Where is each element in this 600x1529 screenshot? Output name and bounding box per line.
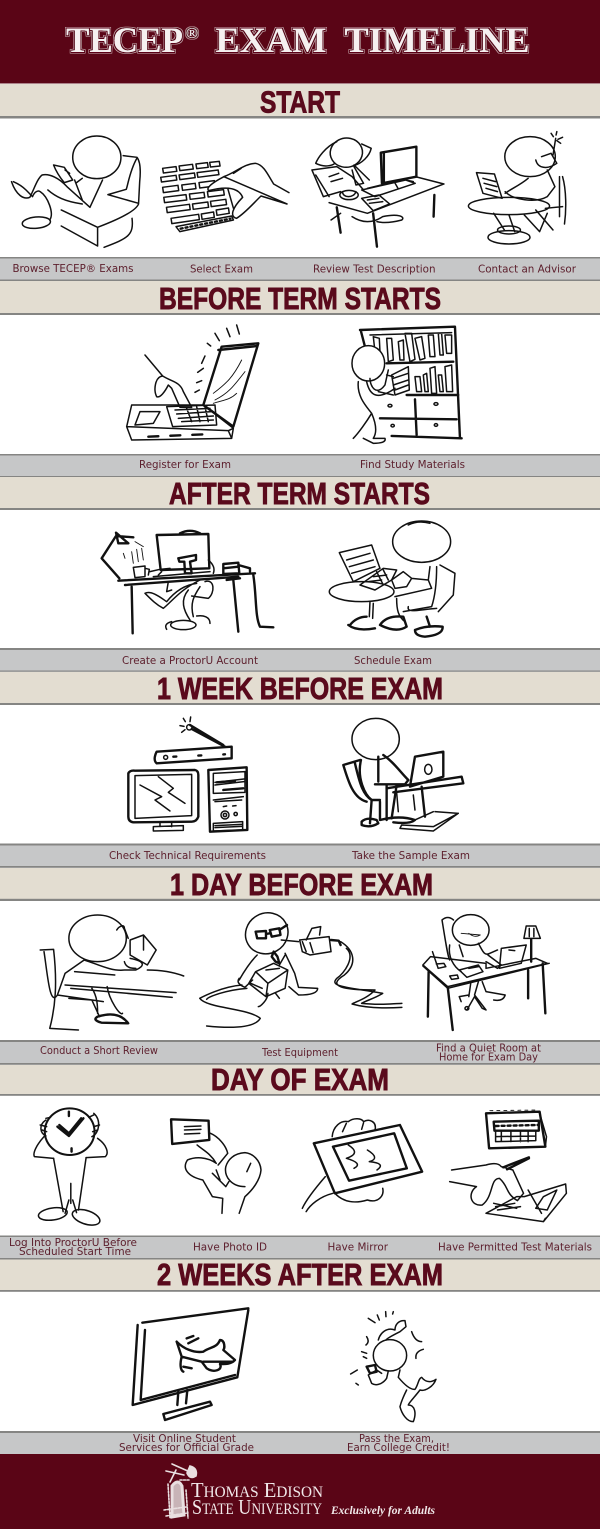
caption: contact: Contact an Advisor bbox=[478, 264, 577, 276]
title: TIMELINE bbox=[344, 20, 530, 60]
caption: online student services bbox=[119, 1433, 254, 1454]
caption: log into proctoru: Scheduled Start Time bbox=[19, 1246, 131, 1258]
heading: two weeks after exam: 2 WEEKS AFTER EXAM bbox=[157, 1257, 443, 1292]
icon: person taking sample exam on laptop bbox=[343, 718, 463, 831]
caption: proctoru account: Create a ProctorU Account bbox=[122, 655, 258, 667]
caption: short review: Conduct a Short Review bbox=[40, 1045, 158, 1057]
caption: schedule: Schedule Exam bbox=[354, 655, 432, 667]
heading: one week before exam: 1 WEEK BEFORE EXAM bbox=[157, 671, 443, 706]
caption: browse: Browse TECEP® Exams bbox=[12, 263, 134, 275]
icon: celebrating person bbox=[351, 1312, 436, 1422]
icon: monitor with thumbs up bbox=[133, 1308, 248, 1420]
caption: quiet room bbox=[436, 1042, 541, 1064]
caption: log into proctoru: Log Into ProctorU Before bbox=[9, 1237, 137, 1249]
caption: quiet room: Find a Quiet Room at bbox=[436, 1042, 541, 1054]
heading: after term starts: AFTER TERM STARTS bbox=[169, 476, 430, 511]
caption: select: Select Exam bbox=[190, 264, 253, 276]
university name: THOMAS EDISON bbox=[191, 1478, 323, 1502]
icon: calendar pencil and notebook bbox=[450, 1110, 566, 1222]
caption: test materials: Have Permitted Test Materials bbox=[438, 1242, 592, 1254]
caption: pass the exam: Pass the Exam, bbox=[359, 1433, 434, 1445]
icon: person with glasses testing equipment bbox=[200, 909, 402, 1027]
caption: online student services: Services for Official Grade bbox=[119, 1442, 254, 1454]
caption: pass the exam bbox=[347, 1433, 450, 1454]
title: TECEP bbox=[66, 20, 183, 60]
icon: person working at home desk bbox=[423, 915, 549, 1030]
icon: person at bookshelf bbox=[352, 327, 462, 443]
caption: online student services: Visit Online Student bbox=[133, 1433, 236, 1445]
panel: start bbox=[0, 84, 600, 281]
caption: log into proctoru bbox=[9, 1237, 137, 1258]
caption: study materials: Find Study Materials bbox=[360, 459, 465, 471]
caption: review: Review Test Description bbox=[313, 264, 436, 276]
icon: person reading in chair bbox=[40, 915, 184, 1030]
panel: one day before exam bbox=[0, 867, 600, 1065]
heading: day of exam: DAY OF EXAM bbox=[211, 1062, 389, 1097]
caption: pass the exam: Earn College Credit! bbox=[347, 1442, 450, 1454]
icon: person behind desk and monitor bbox=[102, 531, 273, 633]
panel: two weeks after exam bbox=[0, 1257, 600, 1454]
panel: after term starts bbox=[0, 476, 600, 672]
caption: quiet room: Home for Exam Day bbox=[439, 1052, 538, 1064]
icon: hand holding photo ID bbox=[171, 1119, 261, 1213]
icon: person phoning advisor at round table bbox=[468, 132, 566, 244]
footer banner bbox=[0, 1454, 600, 1529]
icon: person on sofa with phone bbox=[11, 136, 140, 247]
caption: test equipment: Test Equipment bbox=[261, 1047, 338, 1059]
panel: one week before exam bbox=[0, 671, 600, 868]
caption: register: Register for Exam bbox=[139, 459, 231, 471]
caption: mirror: Have Mirror bbox=[328, 1242, 389, 1254]
icon: router monitor and computer bbox=[128, 717, 247, 832]
heading: start: START bbox=[260, 84, 340, 120]
title: EXAM bbox=[216, 20, 326, 60]
university name bbox=[191, 1478, 323, 1519]
icon: hands holding mirror bbox=[302, 1119, 422, 1212]
icon: university lamp logo bbox=[164, 1464, 196, 1518]
icon: person typing at round table bbox=[329, 521, 455, 637]
heading: one day before exam: 1 DAY BEFORE EXAM bbox=[170, 867, 433, 902]
icon: finger on laptop bbox=[127, 325, 258, 440]
header banner bbox=[0, 0, 600, 84]
panel: before term starts bbox=[0, 281, 600, 477]
caption: photo id: Have Photo ID bbox=[193, 1242, 267, 1254]
icon: hand on keyboard bbox=[161, 161, 289, 232]
icon: person reading at desk with monitor bbox=[312, 135, 444, 247]
title bbox=[66, 20, 530, 60]
title: ® bbox=[186, 26, 198, 42]
icon: person holding clock bbox=[34, 1108, 107, 1228]
caption: technical requirements: Check Technical Requirements bbox=[109, 850, 266, 862]
heading: before term starts: BEFORE TERM STARTS bbox=[159, 281, 441, 316]
panel: day of exam bbox=[0, 1062, 600, 1260]
caption: sample exam: Take the Sample Exam bbox=[351, 850, 470, 862]
university name: STATE UNIVERSITY bbox=[192, 1495, 322, 1519]
tagline: Exclusively for Adults bbox=[330, 1503, 435, 1517]
